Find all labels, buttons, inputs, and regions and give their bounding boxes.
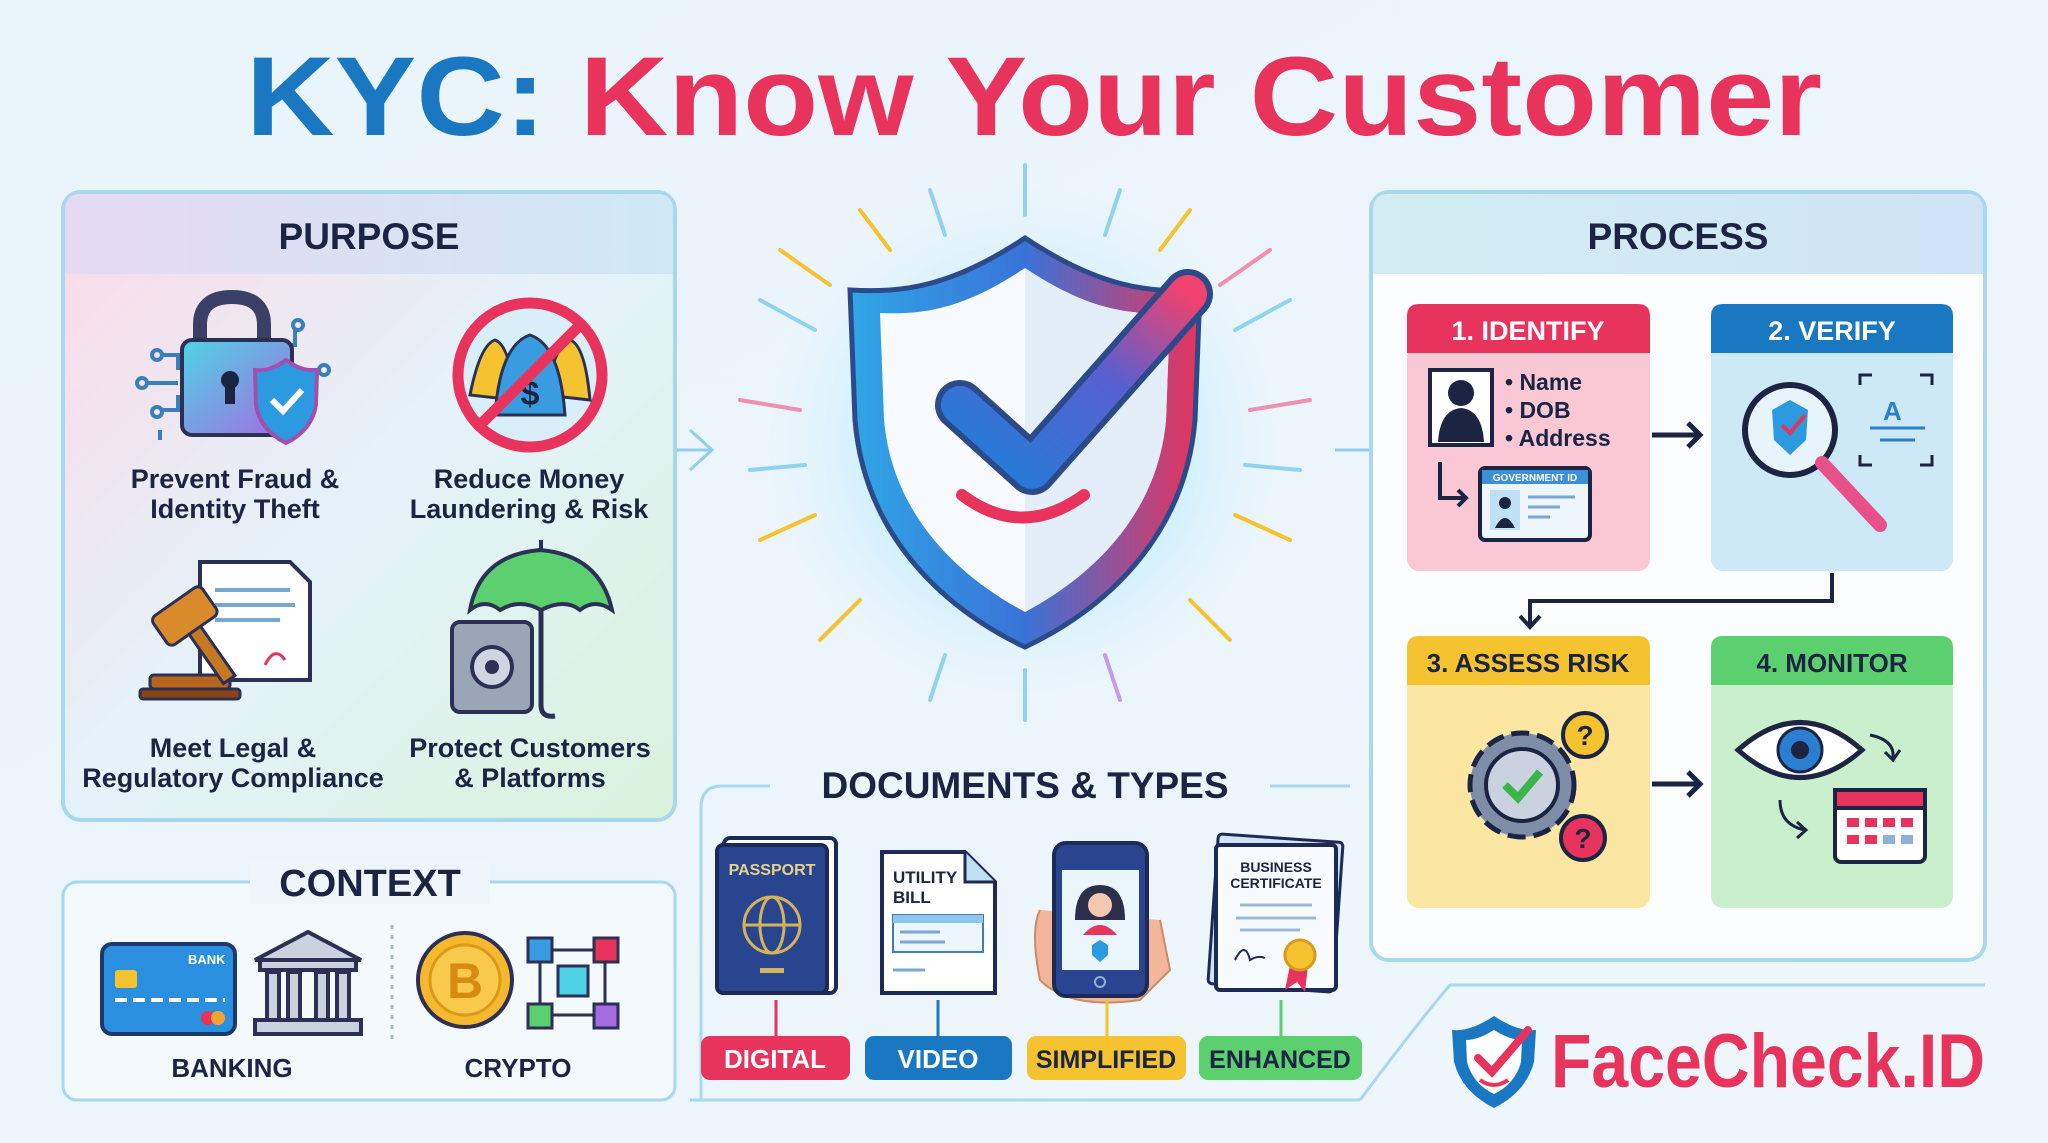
icon: passport — [717, 838, 836, 993]
icon: business certificate: CERTIFICATE — [1230, 875, 1322, 891]
step 1: identify: • DOB — [1505, 397, 1571, 423]
badges: VIDEO — [898, 1044, 978, 1074]
icon: business certificate — [1208, 834, 1343, 992]
icon: phone selfie — [1035, 843, 1170, 1002]
icon: bank card — [102, 944, 235, 1034]
icon: no money: $ — [521, 375, 540, 413]
heading: context: CONTEXT — [279, 863, 461, 905]
badges — [701, 1000, 1362, 1080]
arrow: assess to monitor — [1652, 772, 1700, 796]
heading: process: PROCESS — [1588, 216, 1768, 257]
text: meet legal: Regulatory Compliance — [82, 763, 384, 793]
step 3: assess risk: 3. ASSESS RISK — [1427, 648, 1630, 678]
text: reduce money laundering: Laundering & Risk — [410, 494, 649, 524]
icon: gavel and document — [140, 562, 310, 699]
icon: no money — [458, 303, 602, 447]
text: reduce money laundering: Reduce Money — [434, 464, 624, 494]
icon: business certificate: BUSINESS — [1240, 859, 1312, 875]
logo: facecheck.id: FaceCheck.ID — [1551, 1019, 1985, 1104]
badges: DIGITAL — [724, 1044, 826, 1074]
icon: bank building — [255, 932, 361, 1034]
panel: purpose — [63, 192, 675, 820]
heading: documents & types: DOCUMENTS & TYPES — [821, 765, 1229, 806]
step 2: verify: A — [1883, 396, 1902, 426]
connector lines — [675, 430, 1395, 470]
heading: purpose: PURPOSE — [279, 216, 459, 257]
badges: SIMPLIFIED — [1036, 1046, 1176, 1074]
logo: facecheck.id — [1452, 1016, 1985, 1108]
icon: bitcoin — [418, 933, 512, 1027]
title: KYC: Know Your Customer — [246, 34, 1822, 159]
step 1: identify: GOVERNMENT ID — [1493, 473, 1577, 484]
icon: utility bill: UTILITY — [893, 868, 958, 887]
text: meet legal: Meet Legal & — [150, 733, 316, 763]
step 1: identify: • Name — [1505, 369, 1582, 395]
icon: utility bill — [882, 852, 995, 993]
bottom divider near logo — [1360, 985, 1985, 1100]
text: prevent fraud: Prevent Fraud & — [131, 464, 339, 494]
panel: process — [1371, 192, 1985, 960]
icon: blockchain cubes — [528, 938, 618, 1028]
step 2: verify — [1711, 304, 1953, 571]
label: banking: BANKING — [171, 1053, 293, 1083]
icon: utility bill: BILL — [893, 888, 931, 907]
step 1: identify: • Address — [1505, 425, 1611, 451]
icon: bank card: BANK — [188, 952, 226, 967]
icon: passport: PASSPORT — [729, 862, 816, 879]
arrow: verify to assess risk — [1520, 573, 1832, 627]
step 2: verify: 2. VERIFY — [1768, 316, 1896, 346]
step 3: assess risk: ? — [1574, 823, 1592, 854]
icon: umbrella over safe — [452, 540, 612, 716]
icon: lock with shield — [137, 297, 329, 443]
label: crypto: CRYPTO — [465, 1053, 571, 1083]
step 1: identify: 1. IDENTIFY — [1451, 316, 1605, 346]
text: protect customers: Protect Customers — [409, 733, 651, 763]
step 3: assess risk: ? — [1576, 720, 1594, 751]
step 3: assess risk — [1407, 636, 1650, 908]
step 4: monitor: 4. MONITOR — [1756, 648, 1908, 678]
text: prevent fraud: Identity Theft — [150, 494, 320, 524]
arrow: identify to verify — [1652, 423, 1700, 447]
icon: bitcoin: B — [447, 953, 483, 1009]
step 1: identify — [1407, 304, 1650, 571]
panel: documents & types — [690, 765, 1362, 1100]
step 4: monitor — [1711, 636, 1953, 908]
panel: context — [63, 860, 675, 1100]
central shield with rays — [740, 164, 1310, 724]
text: protect customers: & Platforms — [454, 763, 606, 793]
badges: ENHANCED — [1209, 1046, 1351, 1074]
